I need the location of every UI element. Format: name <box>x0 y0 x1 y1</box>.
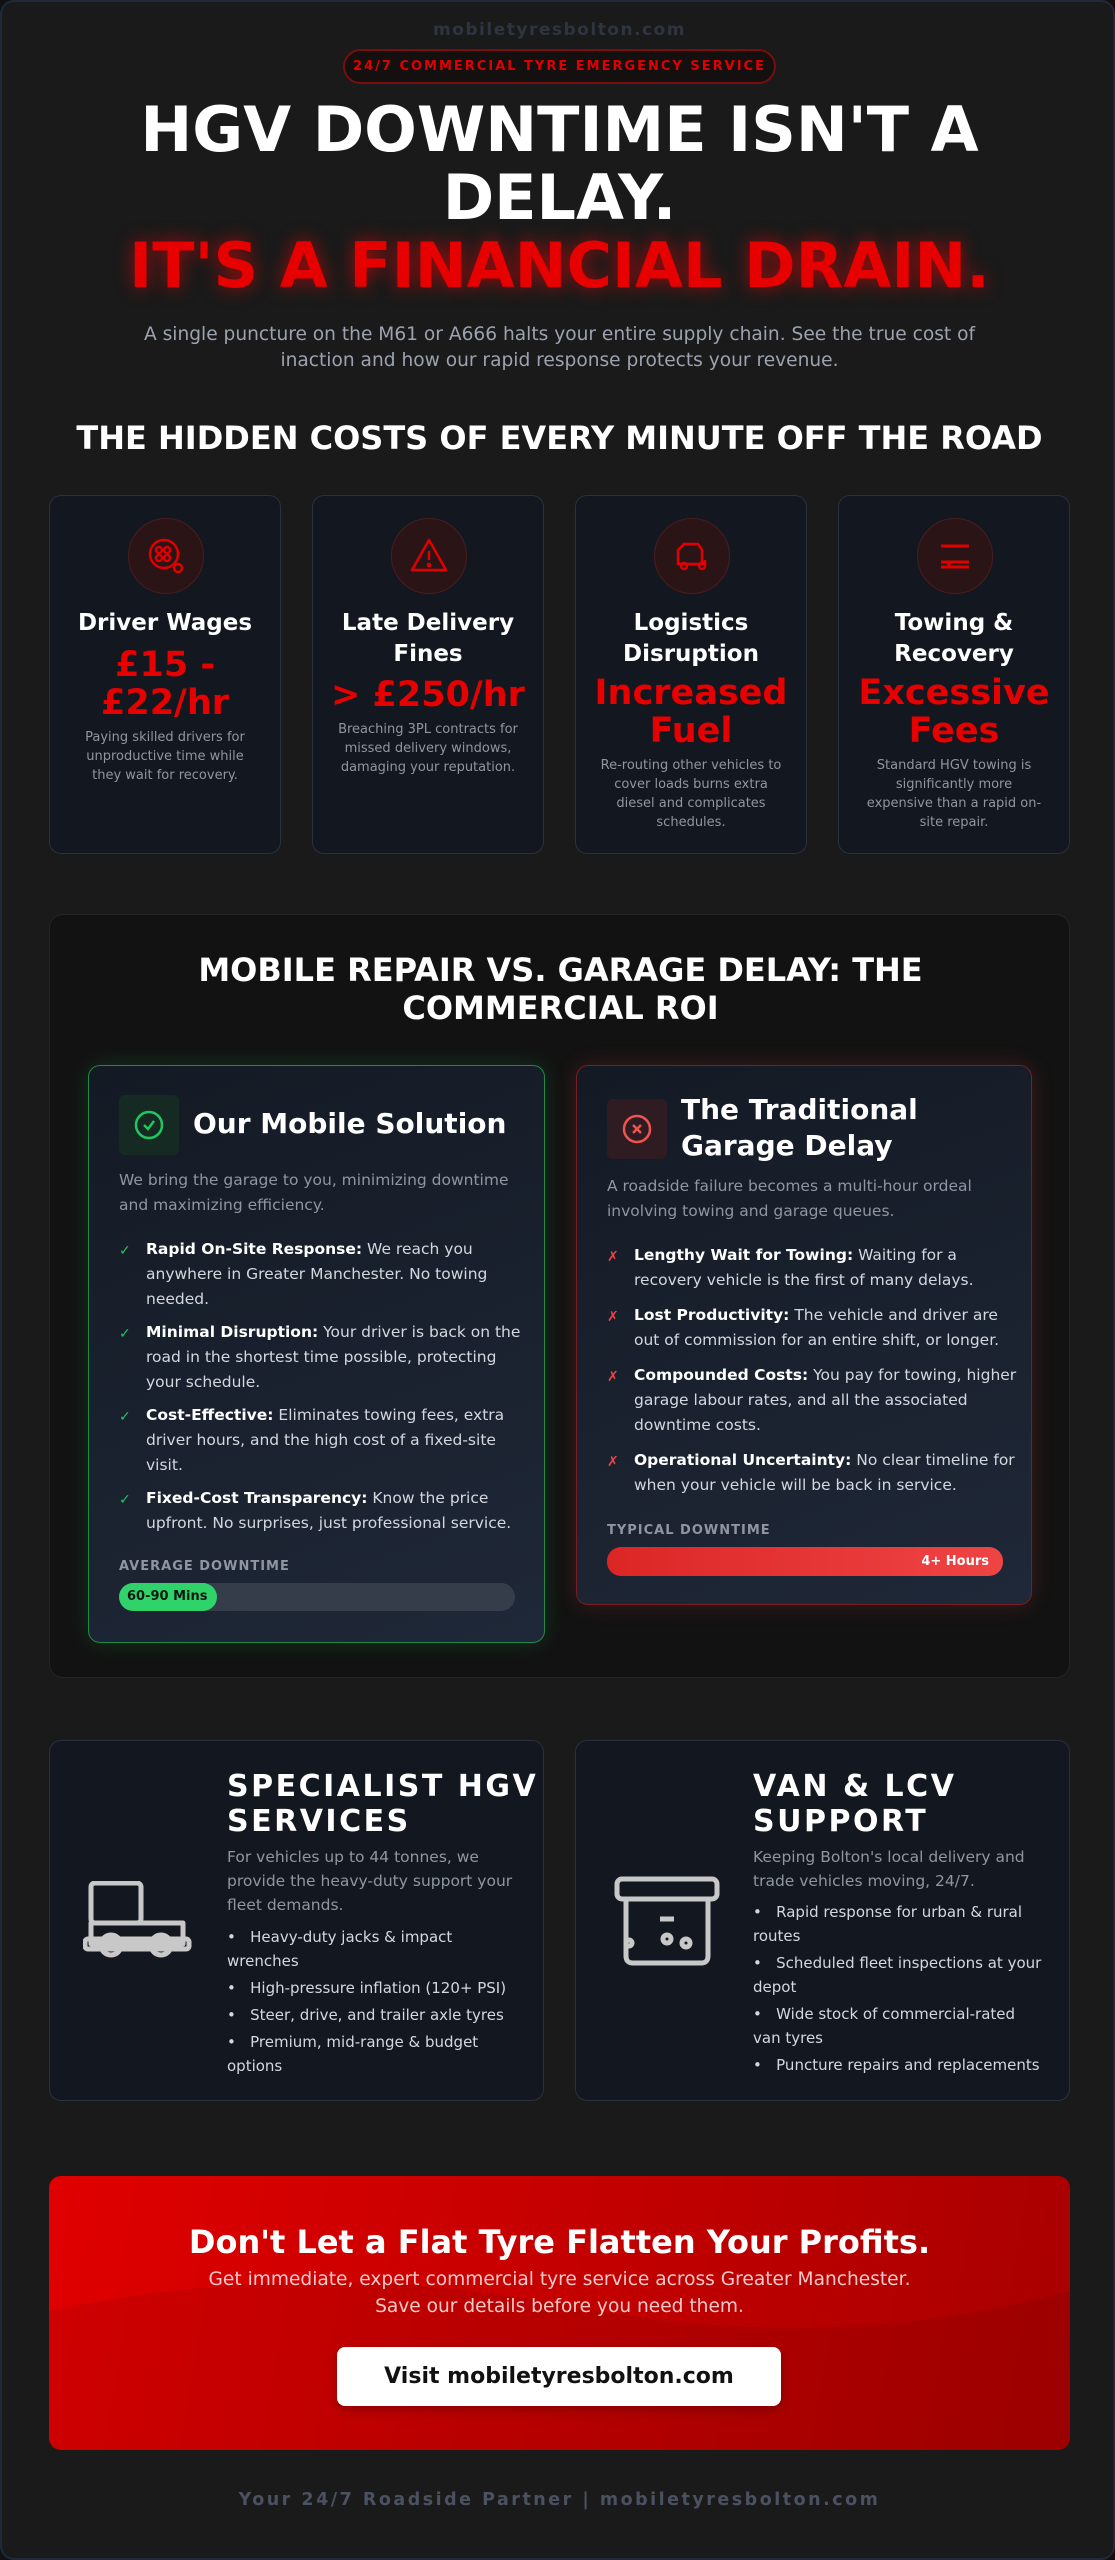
list: drawbacks: ✗ <box>607 1369 619 1385</box>
list: benefits <box>119 1240 520 1532</box>
list: benefits: ✓ <box>119 1492 131 1508</box>
list: drawbacks: ✗ <box>607 1454 619 1470</box>
CTA text: Save our details before you need them. <box>375 2296 744 2317</box>
list: HGV features: • Heavy-duty jacks & impact wrenches <box>227 1928 452 1970</box>
icon: vehicle <box>654 518 730 594</box>
panel: cost logistics: Logistics <box>634 610 748 636</box>
panel: cost driver wages <box>49 495 281 854</box>
subtitle: A single puncture on the M61 or A666 halts your entire supply chain. See the true cost of inaction and how our rapid response protects your revenue. <box>144 324 975 371</box>
CTA text <box>209 2269 910 2317</box>
panel: cost driver wages: £15 - <box>115 645 215 685</box>
panel: HGV services <box>49 1740 544 2101</box>
panel: cost towing: Excessive <box>858 673 1050 713</box>
bar: typical downtime <box>607 1547 1003 1576</box>
card: traditional garage <box>576 1065 1032 1605</box>
panel: van LCV: VAN & LCV <box>753 1769 956 1804</box>
bar: typical downtime: 4+ Hours <box>921 1554 989 1569</box>
icon: cross <box>607 1099 667 1159</box>
panel: cost logistics: Disruption <box>623 641 759 667</box>
list: HGV features: • High-pressure inflation (120+ PSI) <box>227 1979 506 1997</box>
list: benefits: ✓ <box>119 1243 131 1259</box>
card: traditional garage: A roadside failure becomes a multi-hour ordeal involving towing and garage queues. <box>607 1177 972 1220</box>
icon: truck <box>83 1881 192 1958</box>
footer: Your 24/7 Roadside Partner | mobiletyresbolton.com <box>239 2490 880 2510</box>
list: HGV features: • Steer, drive, and trailer axle tyres <box>227 2006 504 2024</box>
panel: van LCV <box>575 1740 1070 2101</box>
panel: cost towing: Recovery <box>894 641 1014 667</box>
CTA text: Get immediate, expert commercial tyre service across Greater Manchester. <box>209 2269 910 2290</box>
title <box>122 93 993 302</box>
panel: cost logistics: Increased <box>595 673 787 713</box>
list: benefits: ✓ <box>119 1409 131 1425</box>
panel: cost logistics: Re-routing other vehicles to cover loads burns extra diesel and complicates schedules. <box>601 758 781 830</box>
panel: cost towing: Towing & <box>895 610 1013 636</box>
list: HGV features: • Premium, mid-range & budget options <box>227 2033 478 2075</box>
card: traditional garage: Garage Delay <box>681 1129 892 1162</box>
title: DELAY. <box>443 161 676 234</box>
list: benefits: Rapid On-Site Response: We reach you anywhere in Greater Manchester. No towing needed. <box>146 1240 487 1308</box>
badge: 24/7 COMMERCIAL TYRE EMERGENCY SERVICE <box>353 59 766 74</box>
panel: cost logistics: Fuel <box>650 711 732 751</box>
icon: warning <box>391 518 467 594</box>
heading: ROI <box>198 951 923 1027</box>
panel: cost driver wages: Driver Wages <box>78 610 252 636</box>
card: mobile solution: AVERAGE DOWNTIME <box>119 1559 290 1574</box>
list: drawbacks: Operational Uncertainty: No clear timeline for when your vehicle will be back in service. <box>634 1451 1015 1494</box>
list: benefits: Fixed-Cost Transparency: Know the price upfront. No surprises, just professional service. <box>146 1489 511 1532</box>
list: HGV features <box>227 1928 506 2075</box>
CTA heading: Don't Let a Flat Tyre Flatten Your Profits. <box>189 2223 930 2261</box>
section heading: hidden costs: THE HIDDEN COSTS OF EVERY MINUTE OFF THE ROAD <box>76 419 1043 457</box>
card: traditional garage: TYPICAL DOWNTIME <box>607 1523 771 1538</box>
domain header: mobiletyresbolton.com <box>433 20 686 40</box>
list: benefits: Cost-Effective: Eliminates towing fees, extra driver hours, and the high cost of a fixed-site visit. <box>146 1406 504 1474</box>
heading: ROI: COMMERCIAL ROI <box>402 989 719 1027</box>
card: mobile solution: We bring the garage to you, minimizing downtime and maximizing efficiency. <box>119 1171 508 1214</box>
panel: cost late delivery: Late Delivery <box>342 610 514 636</box>
badge <box>343 49 776 84</box>
list: van features: • Wide stock of commercial-rated van tyres <box>753 2005 1015 2047</box>
card: mobile solution <box>88 1065 545 1643</box>
panel: cost late delivery: Fines <box>393 641 463 667</box>
panel: cost driver wages: £22/hr <box>101 683 229 723</box>
panel: cost late delivery: > £250/hr <box>331 675 525 715</box>
bar: average downtime <box>119 1583 515 1611</box>
card: mobile solution: Our Mobile Solution <box>193 1107 506 1140</box>
list: van features: • Rapid response for urban & rural routes <box>753 1903 1022 1945</box>
list: drawbacks <box>607 1246 1016 1494</box>
list: drawbacks: Lengthy Wait for Towing: Waiting for a recovery vehicle is the first of many delays. <box>634 1246 974 1289</box>
list: drawbacks: Lost Productivity: The vehicle and driver are out of commission for an entire shift, or longer. <box>634 1306 999 1349</box>
panel: van LCV: Keeping Bolton's local delivery and trade vehicles moving, 24/7. <box>753 1848 1025 1890</box>
panel: HGV services: SPECIALIST HGV <box>227 1769 538 1804</box>
panel: cost towing: Fees <box>909 711 999 751</box>
panel: ROI comparison <box>49 914 1070 1678</box>
CTA button: Visit mobiletyresbolton.com <box>384 2364 734 2389</box>
panel: cost late delivery: Breaching 3PL contracts for missed delivery windows, damaging your reputation. <box>338 722 518 775</box>
list: drawbacks: ✗ <box>607 1249 619 1265</box>
list: van features: • Scheduled fleet inspections at your depot <box>753 1954 1041 1996</box>
icon: van box <box>614 1876 720 1966</box>
icon: check <box>119 1095 179 1155</box>
panel: HGV services: For vehicles up to 44 tonnes, we provide the heavy-duty support your fleet demands. <box>227 1848 512 1914</box>
CTA panel <box>49 2176 1070 2450</box>
list: van features <box>753 1903 1042 2074</box>
list: drawbacks: Compounded Costs: You pay for towing, higher garage labour rates, and all the associated downtime costs. <box>634 1366 1016 1434</box>
panel: cost towing <box>838 495 1070 854</box>
list: drawbacks: ✗ <box>607 1309 619 1325</box>
title: IT'S A FINANCIAL DRAIN. <box>129 229 990 302</box>
list: benefits: Minimal Disruption: Your driver is back on the road in the shortest time possible, protecting your schedule. <box>146 1323 520 1391</box>
panel: cost towing: Standard HGV towing is significantly more expensive than a rapid on-site repair. <box>867 758 1041 830</box>
panel: cost logistics <box>575 495 807 854</box>
icon: coins <box>128 518 204 594</box>
list: benefits: ✓ <box>119 1326 131 1342</box>
bar: average downtime: 60-90 Mins <box>127 1589 208 1604</box>
panel: HGV services: SERVICES <box>227 1804 411 1839</box>
panel: cost driver wages: Paying skilled drivers for unproductive time while they wait for recovery. <box>85 730 245 783</box>
heading: ROI: MOBILE REPAIR VS. GARAGE DELAY: THE <box>198 951 923 989</box>
title: HGV DOWNTIME ISN'T A <box>140 93 979 166</box>
CTA button <box>337 2347 781 2406</box>
card: traditional garage: The Traditional <box>681 1093 918 1126</box>
list: van features: • Puncture repairs and replacements <box>753 2056 1040 2074</box>
panel: van LCV: SUPPORT <box>753 1804 928 1839</box>
panel: cost late delivery <box>312 495 544 854</box>
icon: tow <box>917 518 993 594</box>
